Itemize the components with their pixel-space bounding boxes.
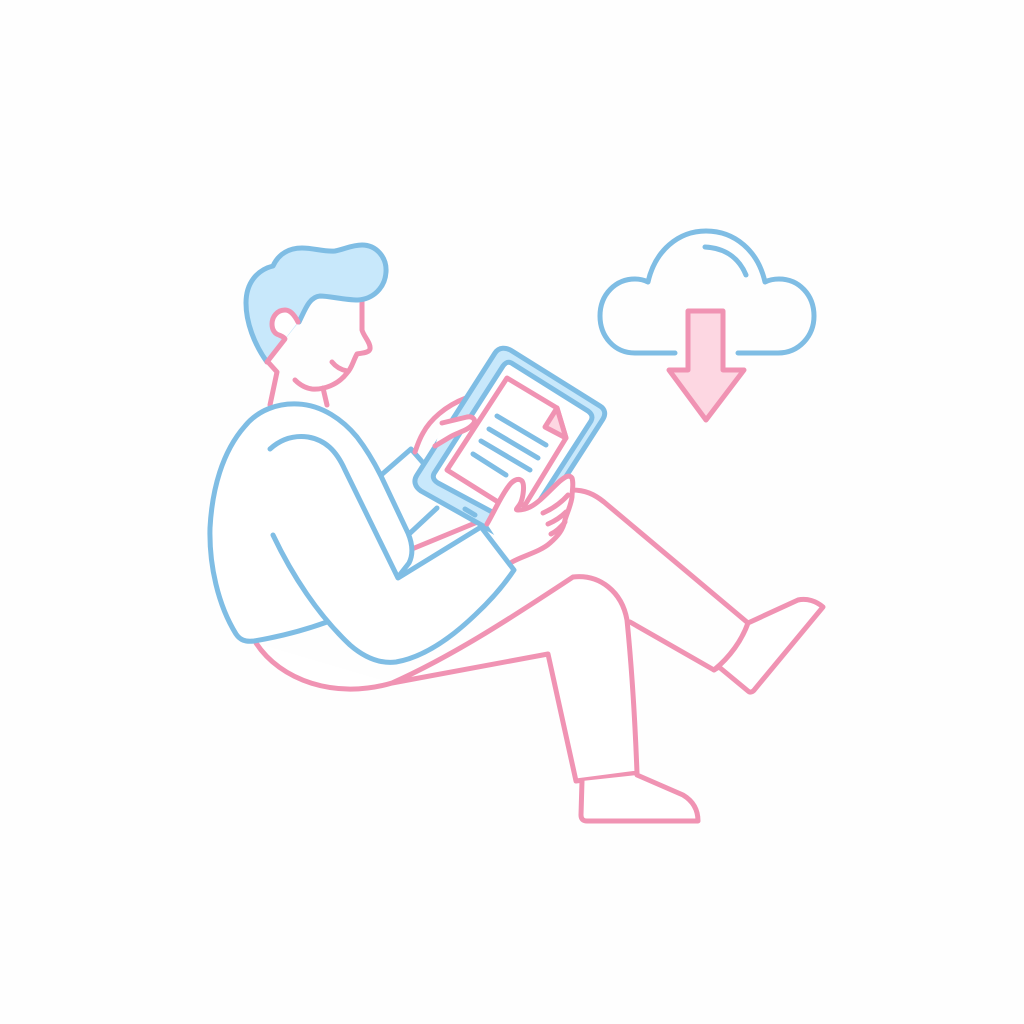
document (447, 378, 566, 505)
front leg (256, 577, 637, 781)
cloud highlight (705, 247, 746, 275)
ear (267, 310, 298, 362)
back thigh (572, 490, 748, 623)
download arrow (669, 311, 744, 420)
tablet (415, 348, 605, 543)
document page (447, 378, 566, 505)
cloud outline (600, 231, 814, 353)
person: back leg (572, 490, 823, 692)
hair (246, 245, 386, 362)
neck (268, 362, 327, 405)
icon: cloud download (600, 231, 814, 420)
person: head (246, 245, 386, 405)
document text lines (473, 416, 546, 475)
nose and jaw (295, 298, 370, 389)
smile (332, 362, 347, 371)
sleeve shape (380, 449, 437, 535)
tablet body (415, 348, 605, 543)
document fold (545, 408, 566, 438)
pink forearm line (412, 521, 480, 549)
far hand fingers (435, 417, 475, 446)
far arm sleeve (380, 449, 480, 549)
person: hips and front leg (256, 577, 698, 821)
finger lines (543, 495, 568, 534)
person: torso and near arm (210, 404, 514, 662)
hand outline (487, 476, 573, 562)
far hand (415, 398, 466, 452)
tablet screen (433, 362, 592, 528)
fingers (435, 417, 475, 446)
near hand (487, 476, 573, 562)
near arm (270, 437, 514, 662)
hand outline (415, 398, 466, 452)
home button (465, 509, 475, 515)
front foot (581, 775, 698, 821)
back shin underside (630, 622, 714, 670)
torso (210, 404, 412, 641)
back foot (714, 599, 823, 692)
